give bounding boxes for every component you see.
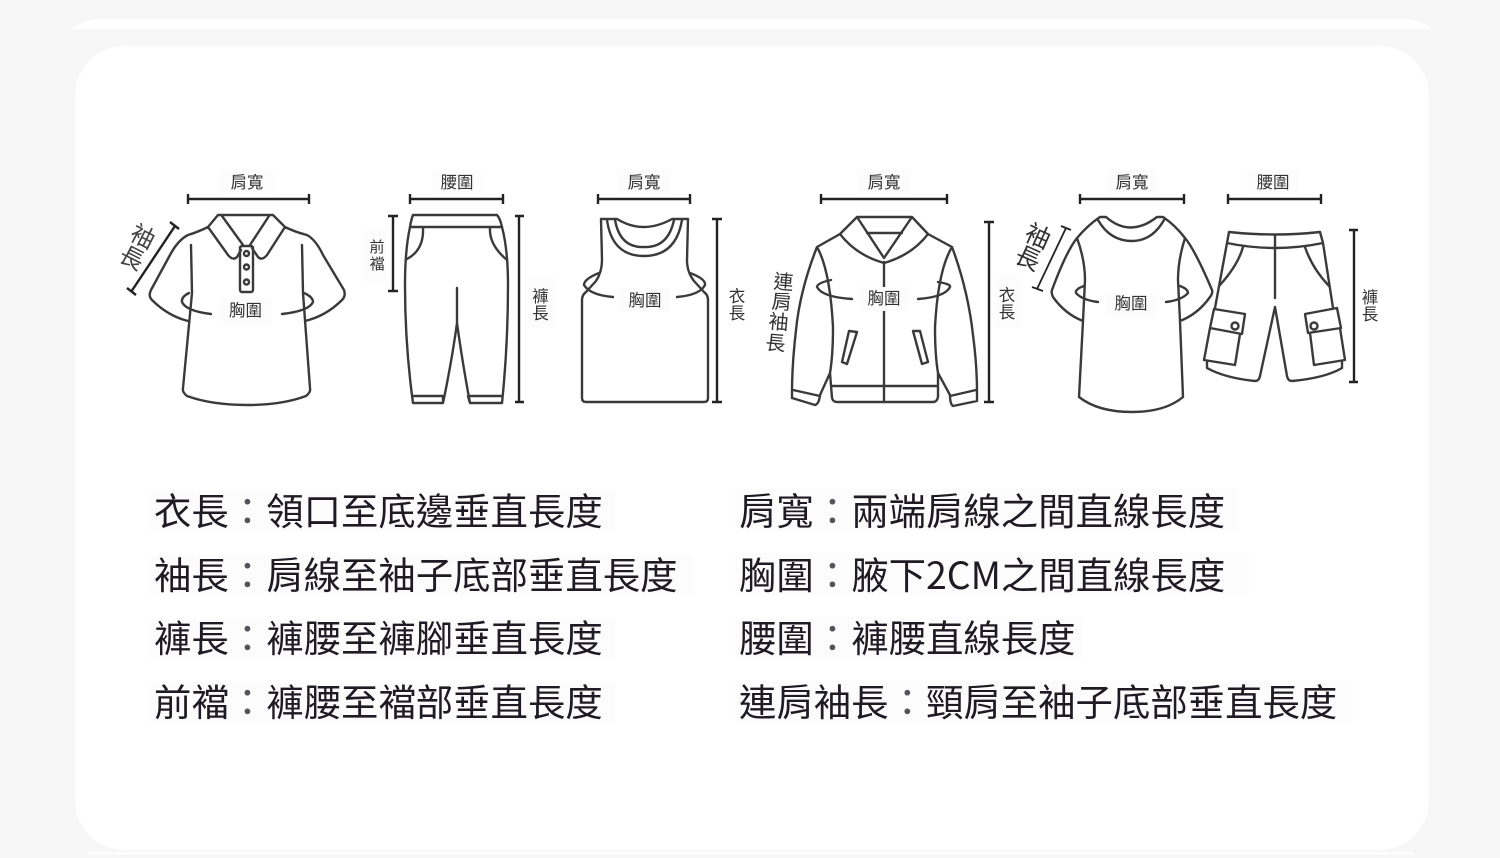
- dimension: jacket length: [984, 222, 994, 402]
- text: pants length: 褲長：褲腰至褲腳垂直長度: [154, 609, 603, 663]
- label: waist: 腰圍: [440, 173, 474, 192]
- dimension: shorts waist: [1228, 194, 1321, 204]
- tank neck band: [607, 220, 682, 256]
- garment: tank top: [582, 219, 708, 402]
- dimension: jacket shoulder: [821, 194, 947, 204]
- label: tank length: 衣: [729, 287, 745, 306]
- garment: zip jacket: [792, 217, 977, 406]
- bottom white strip: [88, 852, 1413, 855]
- garment: cargo shorts: [1204, 232, 1345, 381]
- label: tank chest: 胸圍: [628, 291, 662, 310]
- polo buttons: [244, 251, 249, 284]
- label: polo shoulder: 肩寬: [230, 173, 264, 192]
- label: polo shoulder: [219, 170, 274, 194]
- tank outline: [582, 219, 708, 402]
- label: pants length: [528, 278, 554, 328]
- label: shorts length: [1362, 288, 1379, 324]
- label: jacket shoulder: [858, 170, 910, 194]
- text: sleeve length: 袖長：肩線至袖子底部垂直長度: [154, 546, 678, 600]
- garment: long pants: [405, 215, 508, 403]
- label: shorts length: 長: [1362, 306, 1379, 324]
- tank chest arcs: [584, 273, 705, 297]
- polo outline: [150, 215, 345, 405]
- label: tank shoulder: 肩寬: [628, 173, 660, 192]
- t-shirt outline: [1052, 217, 1212, 412]
- label: pants length: 褲: [532, 287, 549, 306]
- label: shorts waist: [1247, 170, 1299, 194]
- label: t-shirt sleeve: 袖: [1020, 219, 1055, 255]
- label: waist: [432, 170, 482, 194]
- shorts side pockets: [1220, 247, 1329, 286]
- label: front rise: 前: [369, 239, 385, 256]
- dimension: polo sleeve: [127, 222, 179, 295]
- label: polo sleeve: 長: [115, 241, 148, 276]
- dimension: tank length: [712, 219, 722, 402]
- label: shorts length: 褲: [1362, 288, 1378, 307]
- shorts buttons: [1232, 322, 1318, 330]
- text: front rise: 前襠：褲腰至襠部垂直長度: [154, 673, 603, 727]
- label: t-shirt shoulder: 肩寬: [1116, 173, 1148, 192]
- dimension: tank shoulder: [598, 194, 690, 204]
- garment: polo shirt: [150, 215, 345, 405]
- jacket body: [792, 234, 977, 406]
- dimension: t-shirt shoulder: [1080, 194, 1184, 204]
- dimension: front rise: [388, 216, 398, 291]
- shorts right cargo pocket: [1305, 308, 1345, 365]
- label: raglan sleeve length: 袖: [768, 310, 790, 335]
- t-shirt collar band: [1098, 220, 1164, 241]
- label: t-shirt chest: 胸圍: [1114, 294, 1148, 313]
- label: front rise: [364, 230, 386, 282]
- garment: t-shirt: [1052, 217, 1212, 412]
- polo placket: [240, 246, 253, 292]
- label: pants length: 長: [532, 305, 549, 323]
- label: t-shirt sleeve: [1011, 219, 1055, 277]
- label: polo chest: [220, 298, 272, 324]
- jacket pockets: [842, 331, 928, 364]
- label: jacket length: 衣: [999, 286, 1015, 305]
- polo chest arcs: [182, 293, 313, 314]
- jacket hood: [840, 217, 928, 263]
- label: tank length: 長: [729, 305, 746, 323]
- label: jacket chest: [860, 287, 908, 311]
- legend: left column: [150, 482, 693, 727]
- text: garment length: 衣長：領口至底邊垂直長度: [154, 482, 603, 536]
- label: tank length: [729, 287, 746, 323]
- label: t-shirt chest: [1106, 293, 1156, 317]
- label: polo sleeve: 袖: [125, 220, 159, 255]
- shorts left cargo pocket: [1204, 309, 1245, 365]
- dimension: t-shirt sleeve: [1032, 226, 1071, 291]
- label: jacket length: [996, 276, 1020, 328]
- label: raglan sleeve length: 肩: [771, 290, 793, 315]
- top white strip: [70, 19, 1431, 29]
- label: shorts waist: 腰圍: [1256, 173, 1290, 192]
- legend: right column: [735, 482, 1353, 727]
- label: raglan sleeve length: [765, 270, 795, 356]
- label: raglan sleeve length: 連: [773, 270, 795, 295]
- pants pockets: [407, 228, 507, 260]
- label: tank shoulder: [618, 170, 670, 194]
- label: jacket chest: 胸圍: [868, 289, 900, 308]
- dimension: shorts length: [1349, 230, 1358, 382]
- label: raglan sleeve length: 長: [765, 332, 786, 356]
- label: t-shirt sleeve: 長: [1011, 241, 1045, 277]
- label: jacket length: 長: [999, 304, 1016, 322]
- label: front rise: 襠: [369, 256, 385, 273]
- label: polo sleeve: [115, 220, 159, 276]
- dimension: waist: [410, 194, 503, 204]
- text: chest: 胸圍：腋下2CM之間直線長度: [739, 546, 1225, 600]
- label: tank chest: [620, 288, 670, 312]
- text: raglan sleeve: 連肩袖長：頸肩至袖子底部垂直長度: [739, 673, 1337, 727]
- label: t-shirt shoulder: [1107, 170, 1157, 194]
- label: jacket shoulder: 肩寬: [868, 173, 900, 192]
- label: polo chest: 胸圍: [229, 301, 262, 320]
- shorts outline: [1207, 232, 1342, 381]
- jacket chest arcs: [817, 280, 950, 299]
- dimension: polo shoulder: [188, 194, 309, 204]
- text: shoulder width: 肩寬：兩端肩線之間直線長度: [739, 482, 1225, 536]
- t-shirt chest arcs: [1076, 286, 1188, 302]
- pants outline: [405, 215, 508, 403]
- text: waist: 腰圍：褲腰直線長度: [739, 609, 1076, 663]
- dimension: pants length: [515, 216, 524, 402]
